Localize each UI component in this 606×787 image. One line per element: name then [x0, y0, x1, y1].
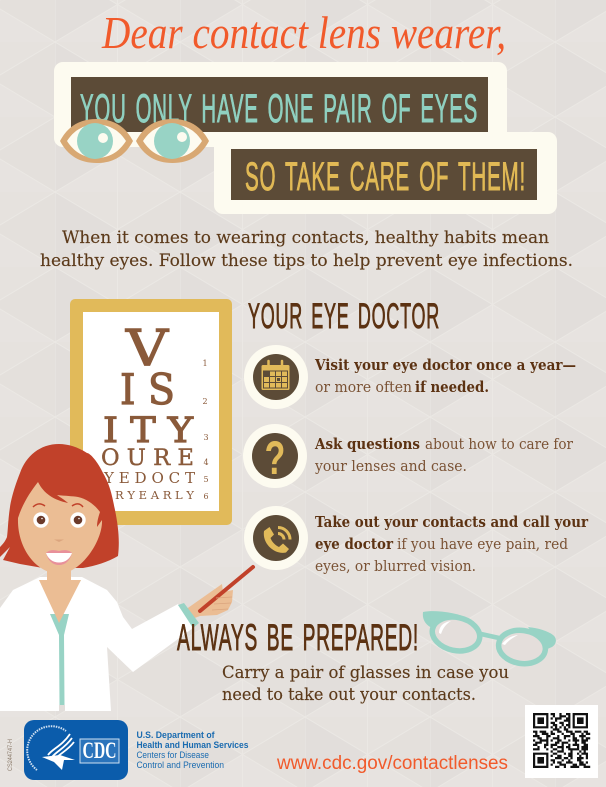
icon: phone — [244, 506, 308, 570]
agency name: Centers for Disease — [136, 750, 209, 760]
neck and neckline — [39, 570, 81, 623]
tip: ask questions: Ask questions — [314, 436, 420, 453]
CDC HHS logo — [24, 720, 128, 780]
eye chart: 4 — [203, 458, 209, 467]
eye chart: I T Y — [103, 411, 194, 451]
tip: take out your contacts: Take out your contacts and call your — [315, 514, 588, 531]
tip: visit your eye doctor — [314, 357, 576, 396]
agency name: Control and Prevention — [136, 760, 224, 770]
prepared body text: need to take out your contacts. — [222, 685, 476, 704]
icon: calendar — [244, 345, 308, 409]
eye chart: Y E D O C T — [103, 469, 195, 487]
icon: pair of eyes — [60, 119, 209, 163]
prepared body text — [222, 663, 509, 704]
hair — [0, 444, 119, 568]
prepared body text: Carry a pair of glasses in case you — [222, 663, 509, 682]
agency name: Health and Human Services — [136, 740, 249, 750]
eye chart: 2 — [202, 397, 208, 406]
fingers — [212, 597, 232, 610]
CDC HHS logo: CDC — [82, 738, 116, 763]
woman doctor illustration — [0, 444, 253, 711]
eye chart — [70, 299, 232, 525]
tip: ask questions: about how to care for — [425, 437, 573, 453]
tip: ask questions: your lenses and case. — [314, 459, 467, 475]
intro text — [40, 228, 573, 270]
eye chart: I S — [120, 365, 175, 414]
intro text: When it comes to wearing contacts, healthy habits mean — [62, 228, 549, 247]
eyes — [33, 512, 86, 528]
eye chart: 5 — [203, 475, 209, 484]
eye chart: 6 — [203, 492, 209, 501]
QR code — [525, 705, 598, 778]
icon: question mark — [243, 424, 307, 488]
eye chart: O U R E — [101, 446, 194, 471]
tip: take out your contacts: eye doctor — [315, 536, 393, 553]
tip: visit your eye doctor: if needed. — [415, 379, 489, 396]
pointer — [200, 567, 253, 611]
eye chart: 3 — [203, 433, 209, 442]
tip: take out your contacts: eyes, or blurred vision. — [315, 559, 476, 575]
nose — [54, 540, 64, 542]
eyebrows — [33, 504, 83, 507]
white coat — [0, 577, 193, 711]
eye chart: R Y E A R L Y — [115, 489, 195, 502]
tip: take out your contacts: if you have eye pain, red — [397, 537, 568, 553]
agency name: U.S. Department of — [136, 730, 215, 740]
eye chart: V — [125, 319, 169, 377]
agency name — [136, 730, 249, 770]
icon: question mark: ? — [265, 432, 285, 484]
face — [18, 482, 102, 574]
tip: visit your eye doctor: Visit your eye doctor once a year— — [314, 357, 576, 374]
tip: take out your contacts — [315, 514, 588, 575]
coat cuff — [178, 603, 199, 628]
intro text: healthy eyes. Follow these tips to help prevent eye infections. — [40, 251, 573, 270]
document code: CS244747-H — [7, 739, 14, 771]
tip: ask questions — [314, 436, 573, 475]
banner: you only have one pair of eyes — [54, 62, 507, 147]
title: Dear contact lens wearer, — [101, 8, 506, 58]
banner: so take care of them — [214, 132, 557, 214]
tip: visit your eye doctor: or more often — [315, 380, 412, 396]
website url: www.cdc.gov/contactlenses — [276, 753, 508, 774]
icon: glasses — [423, 611, 556, 667]
mouth — [46, 550, 72, 565]
hand — [185, 584, 233, 619]
teal shirt — [39, 580, 81, 705]
eye chart: 1 — [202, 359, 208, 368]
